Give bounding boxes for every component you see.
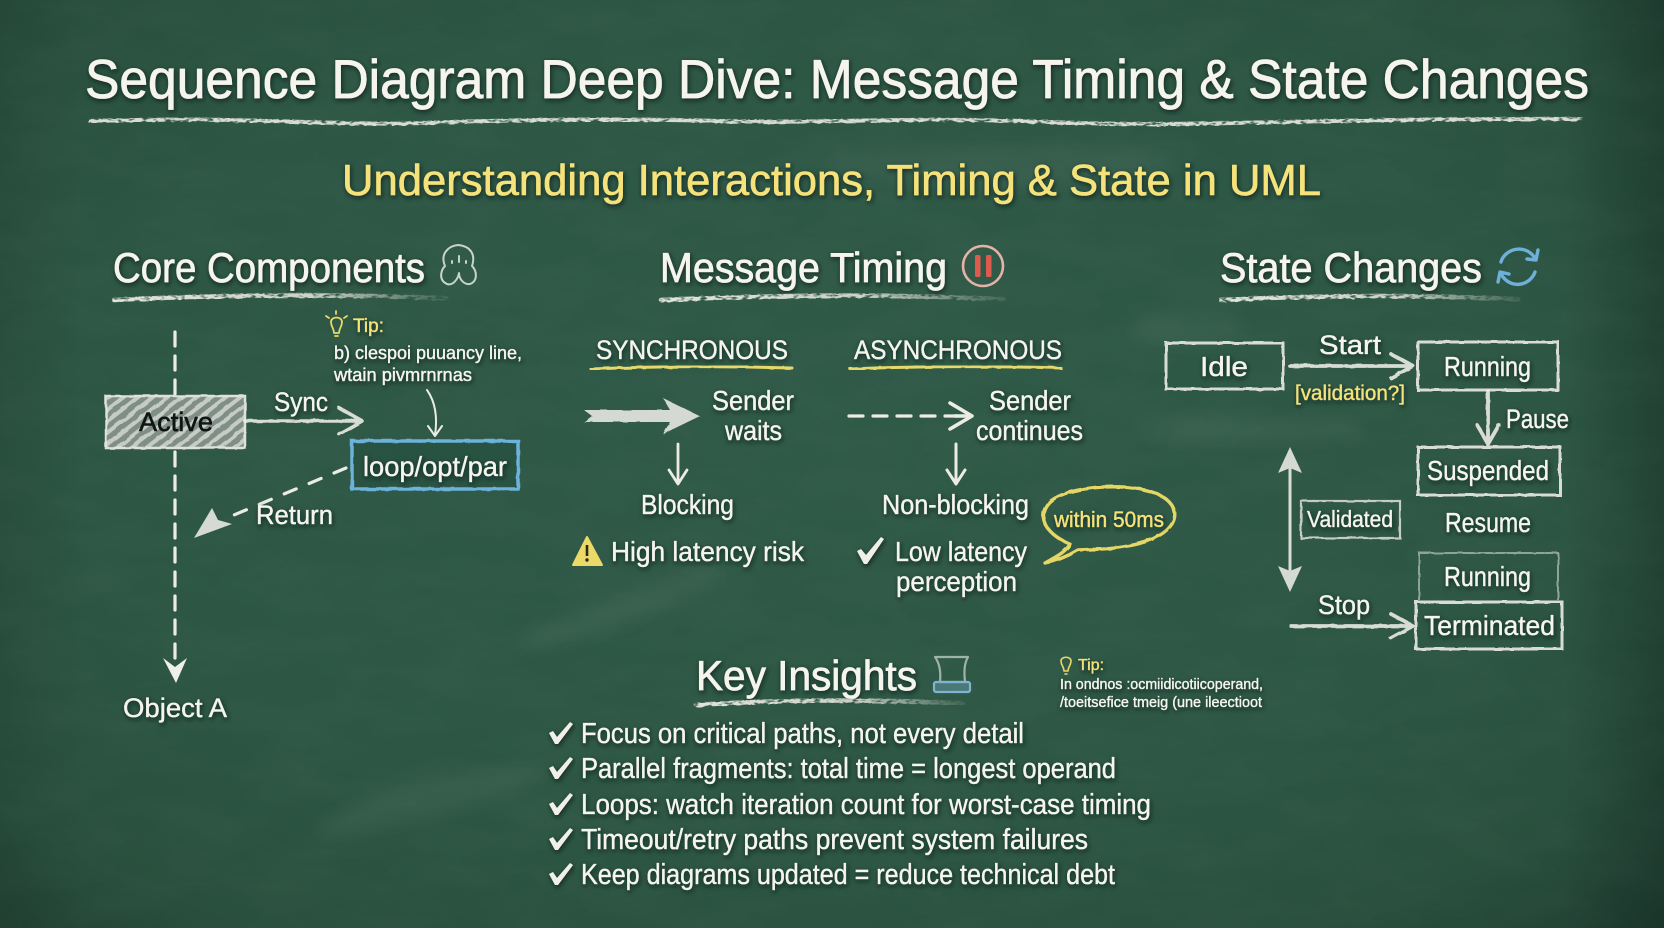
state: validated — [1301, 501, 1400, 538]
icon: check — [857, 537, 884, 564]
tip note: key insights: /toeitsefice tmeig (une ileectioot — [1060, 694, 1263, 711]
label: object A: Object A — [123, 693, 227, 723]
heading: state changes: State Changes — [1220, 244, 1482, 291]
transition: resume: Resume — [1445, 507, 1531, 538]
panel: key insights — [549, 652, 1263, 891]
heading: core components: Core Components — [113, 244, 425, 291]
arrow: synchronous message — [584, 398, 700, 434]
subtitle: Understanding Interactions, Timing & State in UML — [342, 156, 1321, 205]
arrow: asynchronous message — [849, 403, 972, 429]
icon: pause — [963, 246, 1003, 286]
heading: synchronous: SYNCHRONOUS — [596, 335, 788, 365]
tip note: core components: Tip: — [353, 316, 384, 337]
panel: state changes — [1166, 244, 1569, 649]
heading: asynchronous: ASYNCHRONOUS — [854, 335, 1062, 365]
text: sender continues — [976, 385, 1083, 446]
heading: key insights: Key Insights — [696, 652, 917, 699]
icon: tip bulb — [326, 311, 347, 336]
tip note: core components: b) clespoi puuancy line, — [334, 343, 522, 363]
state: suspended — [1418, 447, 1560, 495]
transition: pause: Pause — [1506, 404, 1569, 434]
state: idle: Idle — [1200, 351, 1248, 382]
icon: brain head — [441, 245, 476, 284]
activation box: active: Active — [139, 407, 213, 437]
transition: pause — [1477, 391, 1569, 444]
text: blocking: Blocking — [641, 489, 734, 520]
checklist — [549, 718, 1151, 891]
text: low latency perception: Low latency — [895, 536, 1027, 567]
state: terminated: Terminated — [1424, 610, 1555, 641]
text: non-blocking: Non-blocking — [882, 489, 1029, 520]
fragment: loop/opt/par — [352, 441, 518, 489]
tip note: key insights — [1060, 657, 1263, 711]
arrow: sync message — [245, 387, 362, 434]
icon: tip bulb — [1061, 657, 1071, 674]
item: keep diagrams updated: Keep diagrams updated = reduce technical debt — [581, 859, 1115, 891]
callout: within 50ms — [1043, 487, 1175, 563]
text: high latency risk: High latency risk — [611, 536, 805, 567]
arrow: return message — [194, 468, 346, 538]
item: timeout and retry: Timeout/retry paths prevent system failures — [581, 824, 1088, 856]
item: parallel fragments: Parallel fragments: total time = longest operand — [581, 753, 1116, 785]
text: sender continues: continues — [976, 415, 1083, 446]
text: sender waits: waits — [724, 415, 782, 446]
text: sender waits: Sender — [712, 385, 794, 416]
lifeline: object A — [163, 332, 187, 683]
item: loops: Loops: watch iteration count for worst-case timing — [581, 789, 1151, 821]
title: Sequence Diagram Deep Dive: Message Timing & State Changes — [85, 48, 1589, 110]
arrow: tip pointer — [427, 390, 442, 436]
state: idle — [1166, 343, 1283, 389]
icon: warning — [573, 537, 602, 565]
callout: within 50ms: within 50ms — [1053, 507, 1164, 532]
arrow: validated two-way — [1278, 447, 1302, 592]
transition: stop: Stop — [1318, 590, 1370, 620]
arrow: to blocking — [669, 444, 687, 484]
heading: message timing: Message Timing — [660, 244, 947, 291]
tip note: core components — [326, 311, 522, 385]
tip note: key insights: In ondnos :ocmiidicotiicoperand, — [1060, 676, 1263, 693]
state: running — [1418, 342, 1558, 390]
tip note: key insights: Tip: — [1078, 657, 1104, 674]
tip note: core components: wtain pivmrnrnas — [333, 365, 472, 385]
arrow: to non-blocking — [947, 444, 965, 484]
state: suspended: Suspended — [1427, 455, 1549, 486]
state: running again — [1419, 553, 1558, 600]
transition: start — [1290, 330, 1413, 378]
text: sender continues: Sender — [989, 385, 1071, 416]
panel: message timing — [573, 244, 1175, 597]
fragment: loop/opt/par: loop/opt/par — [363, 451, 507, 482]
activation box: active — [106, 396, 245, 448]
transition: start: Start — [1319, 330, 1382, 360]
icon: refresh — [1498, 249, 1538, 284]
transition: stop — [1291, 590, 1413, 638]
state: terminated — [1416, 602, 1562, 649]
state: running: Running — [1444, 351, 1531, 382]
item: critical paths: Focus on critical paths, not every detail — [581, 718, 1024, 750]
arrow: return message: Return — [256, 500, 333, 530]
column: asynchronous — [849, 335, 1175, 597]
text: low latency perception: perception — [896, 566, 1017, 597]
state: running again: Running — [1444, 561, 1531, 592]
panel: core components — [106, 244, 522, 723]
arrow: sync message: Sync — [274, 387, 328, 417]
column: synchronous — [573, 335, 805, 567]
icon: scroll — [934, 657, 970, 692]
text: low latency perception — [895, 536, 1027, 597]
state: validated: Validated — [1307, 506, 1393, 532]
guard: validation: [validation?] — [1295, 382, 1405, 405]
text: sender waits — [712, 385, 794, 446]
